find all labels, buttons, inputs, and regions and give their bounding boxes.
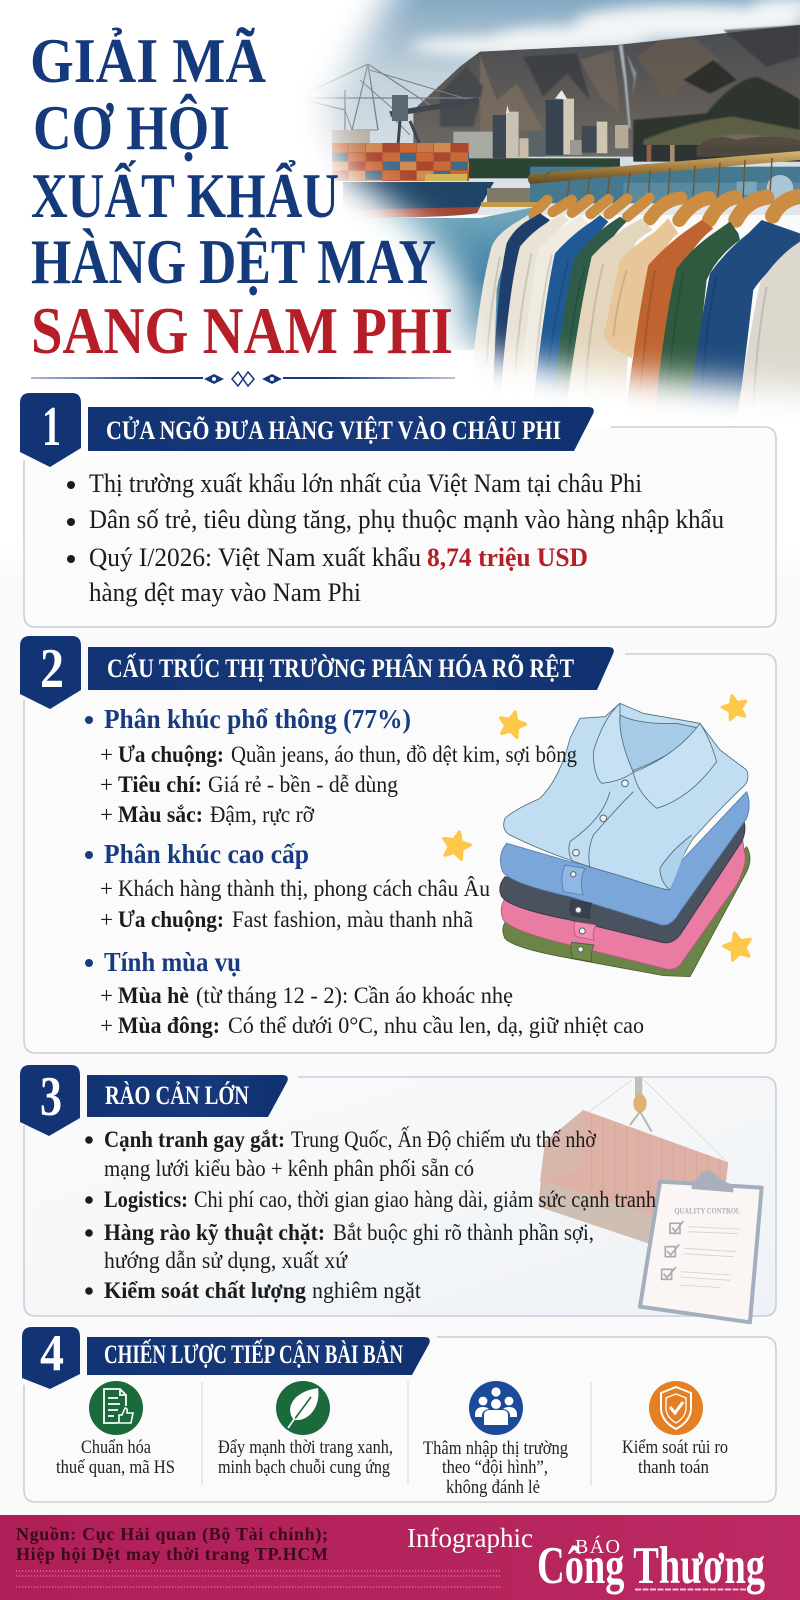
stacked folded shirts illustration [500, 703, 750, 977]
strategy item 2 text [218, 1438, 393, 1478]
segment: mass market: Đậm, rực rỡ [210, 802, 315, 827]
segment: premium [85, 838, 490, 932]
segment: seasonality: (từ tháng 12 - 2): Cần áo khoác nhẹ [196, 983, 513, 1008]
panel 4: strategy [22, 1325, 776, 1502]
segment: seasonality: Có thể dưới 0°C, nhu cầu len, dạ, giữ nhiệt cao [228, 1013, 644, 1038]
segment: mass market: Giá rẻ - bền - dễ dùng [208, 772, 398, 797]
clothes rack [528, 151, 800, 205]
segment: premium: Phân khúc cao cấp [104, 838, 309, 869]
panel 1: gateway [20, 393, 776, 627]
segment: mass market [85, 703, 577, 827]
panel 2: market structure [20, 636, 776, 1053]
faded container on crane [538, 1077, 728, 1243]
icon: green leaf [276, 1381, 330, 1435]
strategy item 1 text: thuế quan, mã HS [56, 1458, 175, 1478]
strategy item 3 text [423, 1439, 568, 1498]
strategy item 4 text: thanh toán [638, 1458, 709, 1478]
panel 4 header bar [87, 1337, 430, 1375]
segment: mass market: Ưa chuộng: [118, 742, 224, 767]
segment: seasonality: + [100, 983, 113, 1008]
panel 3 bullet list: Logistics: [104, 1187, 188, 1212]
source credit [16, 1524, 328, 1564]
panel 1 bullet list: 8,74 triệu USD [427, 542, 588, 572]
segment: mass market: Tiêu chí: [118, 772, 202, 797]
panel 3 number badge [20, 1065, 80, 1136]
panel 1 bullet list: Dân số trẻ, tiêu dùng tăng, phụ thuộc mạnh vào hàng nhập khẩu [89, 504, 724, 534]
icon: document with thumbs up [89, 1381, 143, 1435]
panel 3 bullet list: Cạnh tranh gay gắt: [104, 1127, 285, 1152]
title: XUẤT KHẨU [31, 160, 339, 231]
segment: mass market: Phân khúc phổ thông (77%) [104, 703, 411, 734]
icon: group of people [469, 1381, 523, 1435]
strategy item 2 text: minh bạch chuỗi cung ứng [218, 1458, 390, 1478]
white fade over hero edges [0, 0, 800, 560]
source credit: Nguồn: Cục Hải quan (Bộ Tài chính); [16, 1524, 328, 1545]
panel 3 header bar: RÀO CẢN LỚN [105, 1080, 249, 1110]
panel 3 bullet list: Bắt buộc ghi rõ thành phần sợi, [333, 1220, 594, 1245]
title divider ornament [31, 372, 455, 386]
strategy item 1 text [56, 1438, 175, 1478]
segment: seasonality: + [100, 1013, 113, 1038]
hero image: port, mountain and clothes rack [0, 0, 800, 560]
segment: seasonality: Mùa hè [118, 983, 189, 1008]
strategy item 2 text: Đẩy mạnh thời trang xanh, [218, 1438, 393, 1458]
panel 4 number badge: 4 [40, 1325, 64, 1382]
panel 1 number badge: 1 [42, 396, 61, 458]
title: GIẢI MÃ [30, 26, 266, 96]
segment: seasonality [85, 946, 644, 1038]
strategy item 3 text: theo “đội hình”, [442, 1458, 548, 1478]
panel 2 header bar [88, 647, 614, 690]
segment: premium: Fast fashion, màu thanh nhã [232, 907, 473, 932]
newspaper logo: BÁO [575, 1535, 620, 1558]
panel 1 bullet list: hàng dệt may vào Nam Phi [89, 577, 361, 607]
segment: seasonality: Tính mùa vụ [104, 946, 241, 977]
title: HÀNG DỆT MAY [31, 227, 436, 297]
title: CƠ HỘI [33, 93, 230, 163]
panel 4 header bar: CHIẾN LƯỢC TIẾP CẬN BÀI BẢN [104, 1338, 403, 1369]
panel 3 bullet list [85, 1126, 656, 1303]
strategy item 4 text [622, 1438, 728, 1478]
strategy item 4 text: Kiểm soát rủi ro [622, 1438, 728, 1458]
faded quality-control clipboard: QUALITY CONTROL [674, 1206, 740, 1215]
segment: mass market: + [100, 772, 113, 797]
panel 1 bullet list: Thị trường xuất khẩu lớn nhất của Việt Nam tại châu Phi [89, 468, 642, 498]
panel 1 header bar: CỬA NGÕ ĐƯA HÀNG VIỆT VÀO CHÂU PHI [106, 415, 561, 445]
segment: premium: + [100, 876, 113, 901]
icon: shield with check [649, 1381, 703, 1435]
panel 3 bullet list: hướng dẫn sử dụng, xuất xứ [104, 1248, 348, 1273]
panel 1 frame [24, 427, 776, 627]
panel 1 bullet list: Quý I/2026: Việt Nam xuất khẩu [89, 542, 421, 572]
segment: premium: Ưa chuộng: [118, 907, 224, 932]
panel 2 frame [24, 654, 776, 1053]
segment: premium: Khách hàng thành thị, phong cách châu Âu [118, 876, 490, 901]
segment: mass market: Màu sắc: [118, 802, 203, 827]
decorative stars [440, 693, 754, 961]
source credit: Hiệp hội Dệt may thời trang TP.HCM [16, 1544, 328, 1564]
panel 3 bullet list: nghiêm ngặt [312, 1278, 422, 1303]
harbour water [340, 206, 560, 350]
segment: seasonality: Mùa đông: [118, 1013, 220, 1038]
shirts on hangers [467, 197, 800, 430]
panel 3 header bar [87, 1075, 288, 1117]
panel 3 bullet list: Kiểm soát chất lượng [104, 1278, 306, 1303]
strategy item 3 text: Thâm nhập thị trường [423, 1439, 568, 1459]
segment: mass market: Quần jeans, áo thun, đồ dệt kim, sợi bông [231, 742, 577, 767]
segment: mass market: + [100, 802, 113, 827]
faded quality-control clipboard [640, 1171, 762, 1322]
container ship [332, 130, 541, 218]
panel 4 frame [24, 1337, 776, 1502]
strategy item 3 text: không đánh lẻ [446, 1478, 540, 1498]
panel 1 number badge [20, 393, 81, 467]
panel 2 number badge: 2 [40, 638, 64, 700]
panel 3 bullet list: mạng lưới kiểu bào + kênh phân phối sẵn có [104, 1156, 474, 1181]
panel 1 bullet list [67, 468, 724, 607]
panel 1 header bar [88, 407, 594, 451]
panel 3 number badge: 3 [40, 1066, 62, 1128]
panel 4 number badge [22, 1325, 80, 1389]
title [30, 26, 453, 368]
footer band [0, 1515, 800, 1600]
panel 3 bullet list: Trung Quốc, Ấn Độ chiếm ưu thế nhờ [291, 1126, 597, 1152]
title: SANG NAM PHI [31, 294, 453, 368]
panel 3 bullet list: Hàng rào kỹ thuật chặt: [104, 1220, 325, 1245]
crane [296, 64, 480, 145]
segment: premium: + [100, 907, 113, 932]
panel 3 frame [24, 1077, 776, 1316]
segment: mass market: + [100, 742, 113, 767]
panel 3: barriers [20, 1065, 776, 1322]
panel 3 bullet list: Chi phí cao, thời gian giao hàng dài, giảm sức cạnh tranh [194, 1187, 656, 1212]
panel 2 header bar: CẤU TRÚC THỊ TRƯỜNG PHÂN HÓA RÕ RỆT [107, 652, 574, 683]
strategy item 1 text: Chuẩn hóa [81, 1438, 151, 1458]
infographic label: Infographic [407, 1523, 533, 1553]
panel 2 number badge [20, 636, 81, 709]
